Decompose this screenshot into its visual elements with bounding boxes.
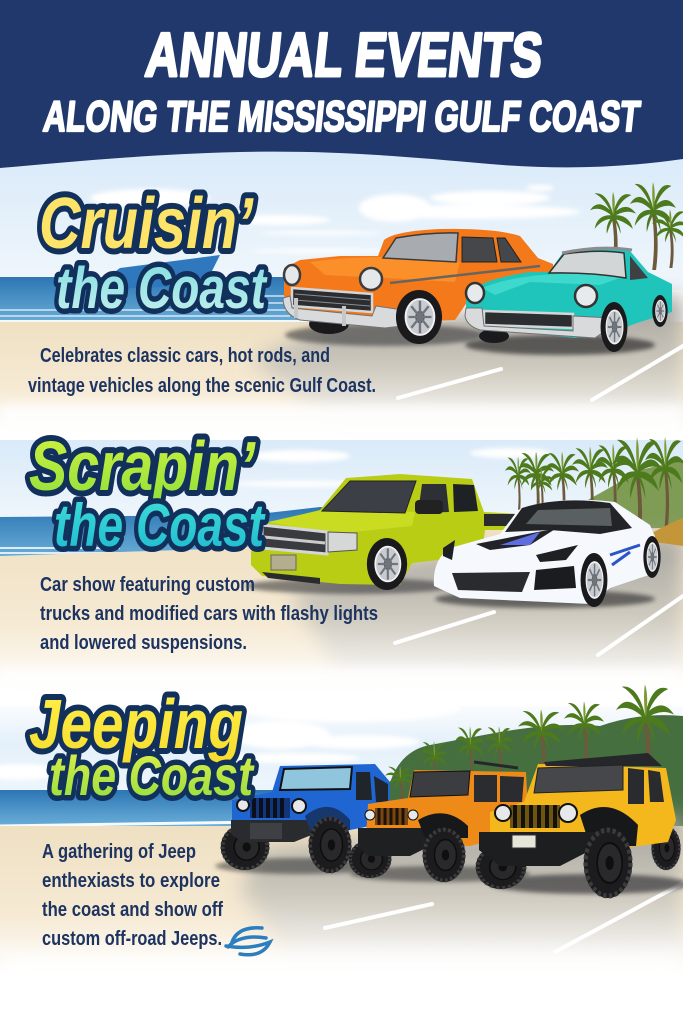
- fade at bottom of panel: [0, 668, 683, 702]
- event title: Scrapin' the Coast: the Coast: [54, 492, 266, 559]
- teal classic car: [465, 248, 672, 355]
- event title: Jeeping the Coast: [29, 685, 255, 807]
- road lane markings: [395, 596, 683, 655]
- event title: Cruisin' the Coast: Cruisin’: [39, 184, 254, 264]
- road lane markings: [325, 883, 683, 952]
- title: [41, 21, 650, 141]
- description text: vintage vehicles along the scenic Gulf Coast.: [28, 374, 376, 397]
- description text: A gathering of Jeep: [42, 840, 196, 863]
- road: [290, 535, 683, 685]
- lime green pickup truck: [245, 474, 520, 594]
- road lane markings: [398, 346, 683, 400]
- fade at bottom of panel: [0, 955, 683, 1024]
- ocean: [0, 790, 380, 826]
- description text: the coast and show off: [42, 898, 223, 921]
- event title: Cruisin' the Coast: the Coast: [56, 256, 268, 321]
- event title: Jeeping the Coast: the Coast: [49, 744, 255, 807]
- blue jeep: [215, 764, 390, 874]
- palm trees: [505, 437, 683, 546]
- white sports car: [434, 500, 661, 608]
- palm trees: [385, 684, 674, 805]
- title: ANNUAL EVENTS: [143, 21, 546, 90]
- tree line: [385, 715, 683, 830]
- hillside: [540, 460, 683, 535]
- sky and clouds: [0, 150, 683, 290]
- description text: Car show featuring custom: [40, 573, 255, 596]
- icon: blue wave logo: [226, 928, 270, 955]
- sky and clouds: [0, 440, 683, 525]
- road: [240, 815, 683, 965]
- description text: [28, 344, 376, 397]
- description text: [40, 573, 378, 654]
- panel: Jeeping the Coast: [0, 684, 683, 1024]
- panel: Cruisin' the Coast: [0, 150, 683, 439]
- description text: Celebrates classic cars, hot rods, and: [40, 344, 330, 367]
- beach sand: [0, 826, 683, 976]
- beach sand: [0, 528, 683, 692]
- panel: Scrapin' the Coast: [0, 427, 683, 702]
- event title: Scrapin' the Coast: Scrapin’: [29, 427, 256, 505]
- sky and clouds: [0, 694, 683, 798]
- fade at bottom of panel: [0, 405, 683, 439]
- description text: trucks and modified cars with flashy lights: [40, 602, 378, 625]
- description text: custom off-road Jeeps.: [42, 927, 222, 950]
- orange jeep: [349, 762, 530, 882]
- event title: Jeeping the Coast: Jeeping: [29, 685, 243, 763]
- event title: Scrapin' the Coast: [29, 427, 266, 559]
- description text: enthexiasts to explore: [42, 869, 220, 892]
- beach sand: [0, 322, 683, 434]
- palm trees: [590, 182, 683, 270]
- orange classic car: [283, 229, 553, 346]
- yellow jeep: [476, 753, 683, 898]
- ocean: [0, 277, 300, 323]
- ocean: [0, 507, 540, 558]
- road: [250, 295, 683, 430]
- description text: and lowered suspensions.: [40, 631, 247, 654]
- header banner: [0, 0, 683, 168]
- event title: Cruisin' the Coast: [39, 184, 268, 321]
- description text: [42, 840, 223, 950]
